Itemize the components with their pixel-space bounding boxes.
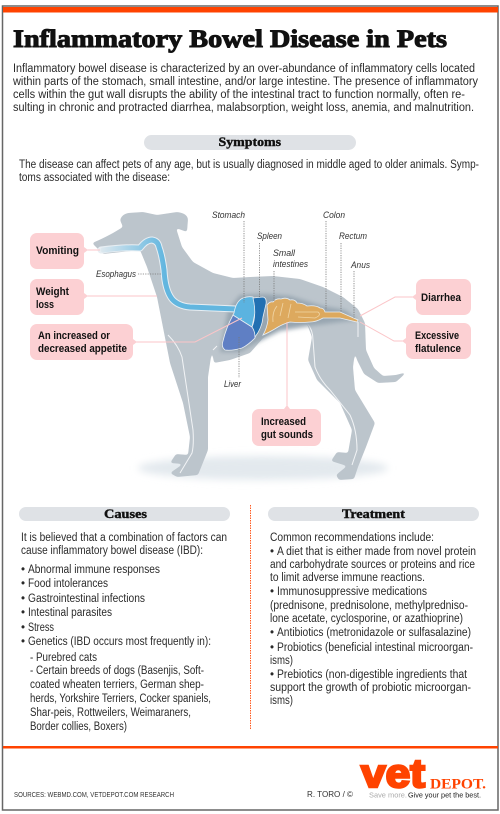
causes text: Border collies, Boxers): [30, 721, 127, 733]
causes text: Stress: [28, 622, 54, 634]
causes text: •: [21, 607, 25, 619]
intro paragraph: within parts of the stomach, small intestine, and/or large intestine. The presence of inflammatory: [12, 76, 478, 88]
callout: appetite: An increased or: [38, 330, 111, 342]
callout: vomiting: Vomiting: [36, 245, 79, 257]
credit: R. TORO / ©: [307, 790, 353, 799]
callout: vomiting: [30, 233, 88, 269]
organ labels: intestines: [273, 259, 308, 269]
treatment text: isms): [270, 695, 293, 707]
causes text: herds, Yorkshire Terriers, Cocker spaniels,: [30, 693, 211, 705]
treatment text: •: [270, 627, 274, 639]
causes text: Food intolerances: [28, 578, 108, 590]
callout: flatulence: flatulence: [415, 343, 461, 355]
heading: causes: Causes: [104, 507, 147, 521]
callout: gut sounds: gut sounds: [261, 429, 313, 441]
causes text: - Certain breeds of dogs (Basenjis, Soft-: [30, 665, 204, 677]
heading: treatment: [268, 507, 479, 521]
causes text: Intestinal parasites: [28, 607, 112, 619]
organ labels: Liver: [224, 379, 242, 389]
treatment text: Probiotics (beneficial intestinal microorgan-: [277, 642, 473, 654]
callout: flatulence: Excessive: [415, 330, 459, 342]
ground shadow: [138, 456, 388, 480]
heading: causes: [19, 507, 230, 521]
dog illustration: [84, 212, 416, 480]
top orange bar: [3, 7, 498, 12]
logo: vet depot: Give your pet the best.: [408, 790, 481, 800]
organ labels: Small: [273, 248, 296, 258]
heading: symptoms: Symptoms: [218, 135, 281, 149]
symptoms intro text: toms associated with the disease:: [19, 172, 170, 184]
intro paragraph: cells within the gut wall disrupts the ability of the intestinal tract to function normally, often re-: [13, 89, 465, 101]
treatment text: Prebiotics (non-digestible ingredients that: [277, 669, 468, 681]
logo: vet depot: vet: [361, 752, 425, 796]
treatment text: (prednisone, prednisolone, methylpredniso-: [270, 600, 468, 612]
esophagus: [101, 240, 236, 309]
intro paragraph: Inflammatory bowel disease is characterized by an over-abundance of inflammatory cells located: [13, 63, 475, 75]
causes text: - Purebred cats: [30, 652, 97, 664]
leg highlight lines: [168, 322, 358, 473]
treatment text: isms): [270, 655, 293, 667]
callout: weight loss: loss: [36, 299, 54, 311]
intestines: [263, 298, 358, 335]
title: Inflammatory Bowel Disease in Pets: [13, 26, 447, 53]
organ shadow: [220, 294, 358, 352]
callout: diarrhea: Diarrhea: [421, 292, 462, 304]
callout: gut sounds: Increased: [261, 416, 306, 428]
heading: treatment: Treatment: [342, 507, 406, 521]
spleen: [252, 297, 266, 337]
treatment text: •: [270, 586, 274, 598]
logo: vet depot: DEPOT.: [430, 776, 486, 792]
causes text: cause inflammatory bowel disease (IBD):: [21, 545, 203, 557]
causes text: •: [21, 593, 25, 605]
callout: appetite: decreased appetite: [38, 343, 127, 355]
callout: gut sounds: [252, 405, 321, 446]
column divider: [250, 505, 252, 729]
organ labels: Rectum: [339, 231, 367, 241]
callout: diarrhea: [412, 279, 471, 315]
callout: appetite: [30, 324, 137, 360]
causes text: •: [21, 636, 25, 648]
treatment text: Antibiotics (metronidazole or sulfasalazine): [277, 627, 471, 639]
causes text: [21, 532, 227, 733]
treatment text: Immunosuppressive medications: [277, 586, 427, 598]
treatment text: •: [270, 669, 274, 681]
treatment text: A diet that is either made from novel protein: [277, 546, 476, 558]
pointer lines: [84, 250, 416, 409]
symptoms intro text: [19, 159, 479, 184]
causes text: coated wheaten terriers, German shep-: [30, 679, 204, 691]
organ labels: Spleen: [257, 231, 282, 241]
heading: symptoms: [144, 135, 356, 150]
causes text: Shar-peis, Rottweilers, Weimaraners,: [30, 707, 191, 719]
causes text: It is believed that a combination of factors can: [21, 532, 227, 544]
organ leader lines: [138, 221, 354, 378]
callout: weight loss: [30, 279, 88, 315]
causes text: •: [21, 622, 25, 634]
organ labels: Colon: [323, 210, 345, 220]
treatment text: and carbohydrate sources or proteins and rice: [270, 559, 475, 571]
organ labels: Anus: [350, 260, 370, 270]
bottom orange rule: [3, 746, 498, 748]
treatment text: •: [270, 642, 274, 654]
treatment text: to limit adverse immune reactions.: [270, 572, 425, 584]
causes text: Abnormal immune responses: [28, 564, 160, 576]
callout: flatulence: [402, 323, 471, 359]
treatment text: Common recommendations include:: [270, 532, 434, 544]
organ labels: Esophagus: [96, 269, 136, 279]
treatment text: support the growth of probiotic microorgan-: [270, 682, 471, 694]
callout: weight loss: Weight: [36, 286, 69, 298]
intro paragraph: [12, 63, 478, 114]
organ labels: Stomach: [212, 210, 245, 220]
causes text: Genetics (IBD occurs most frequently in):: [28, 636, 211, 648]
logo: vet depot: Save more.: [369, 790, 407, 800]
organ labels: [96, 210, 370, 389]
causes text: •: [21, 564, 25, 576]
causes text: Gastrointestinal infections: [28, 593, 145, 605]
causes text: •: [21, 578, 25, 590]
treatment text: lone acetate, cyclosporine, or azathioprine): [270, 613, 463, 625]
treatment text: [270, 532, 476, 707]
sources: SOURCES: WEBMD.COM, VETDEPOT.COM RESEARCH: [14, 790, 174, 799]
treatment text: •: [270, 546, 274, 558]
liver: [222, 315, 255, 350]
intro paragraph: sulting in chronic and protracted diarrhea, malabsorption, weight loss, anemia, and malnutrition.: [13, 102, 474, 114]
stomach: [233, 297, 256, 327]
dog silhouette: [92, 212, 407, 480]
logo: vet depot: [361, 752, 486, 800]
